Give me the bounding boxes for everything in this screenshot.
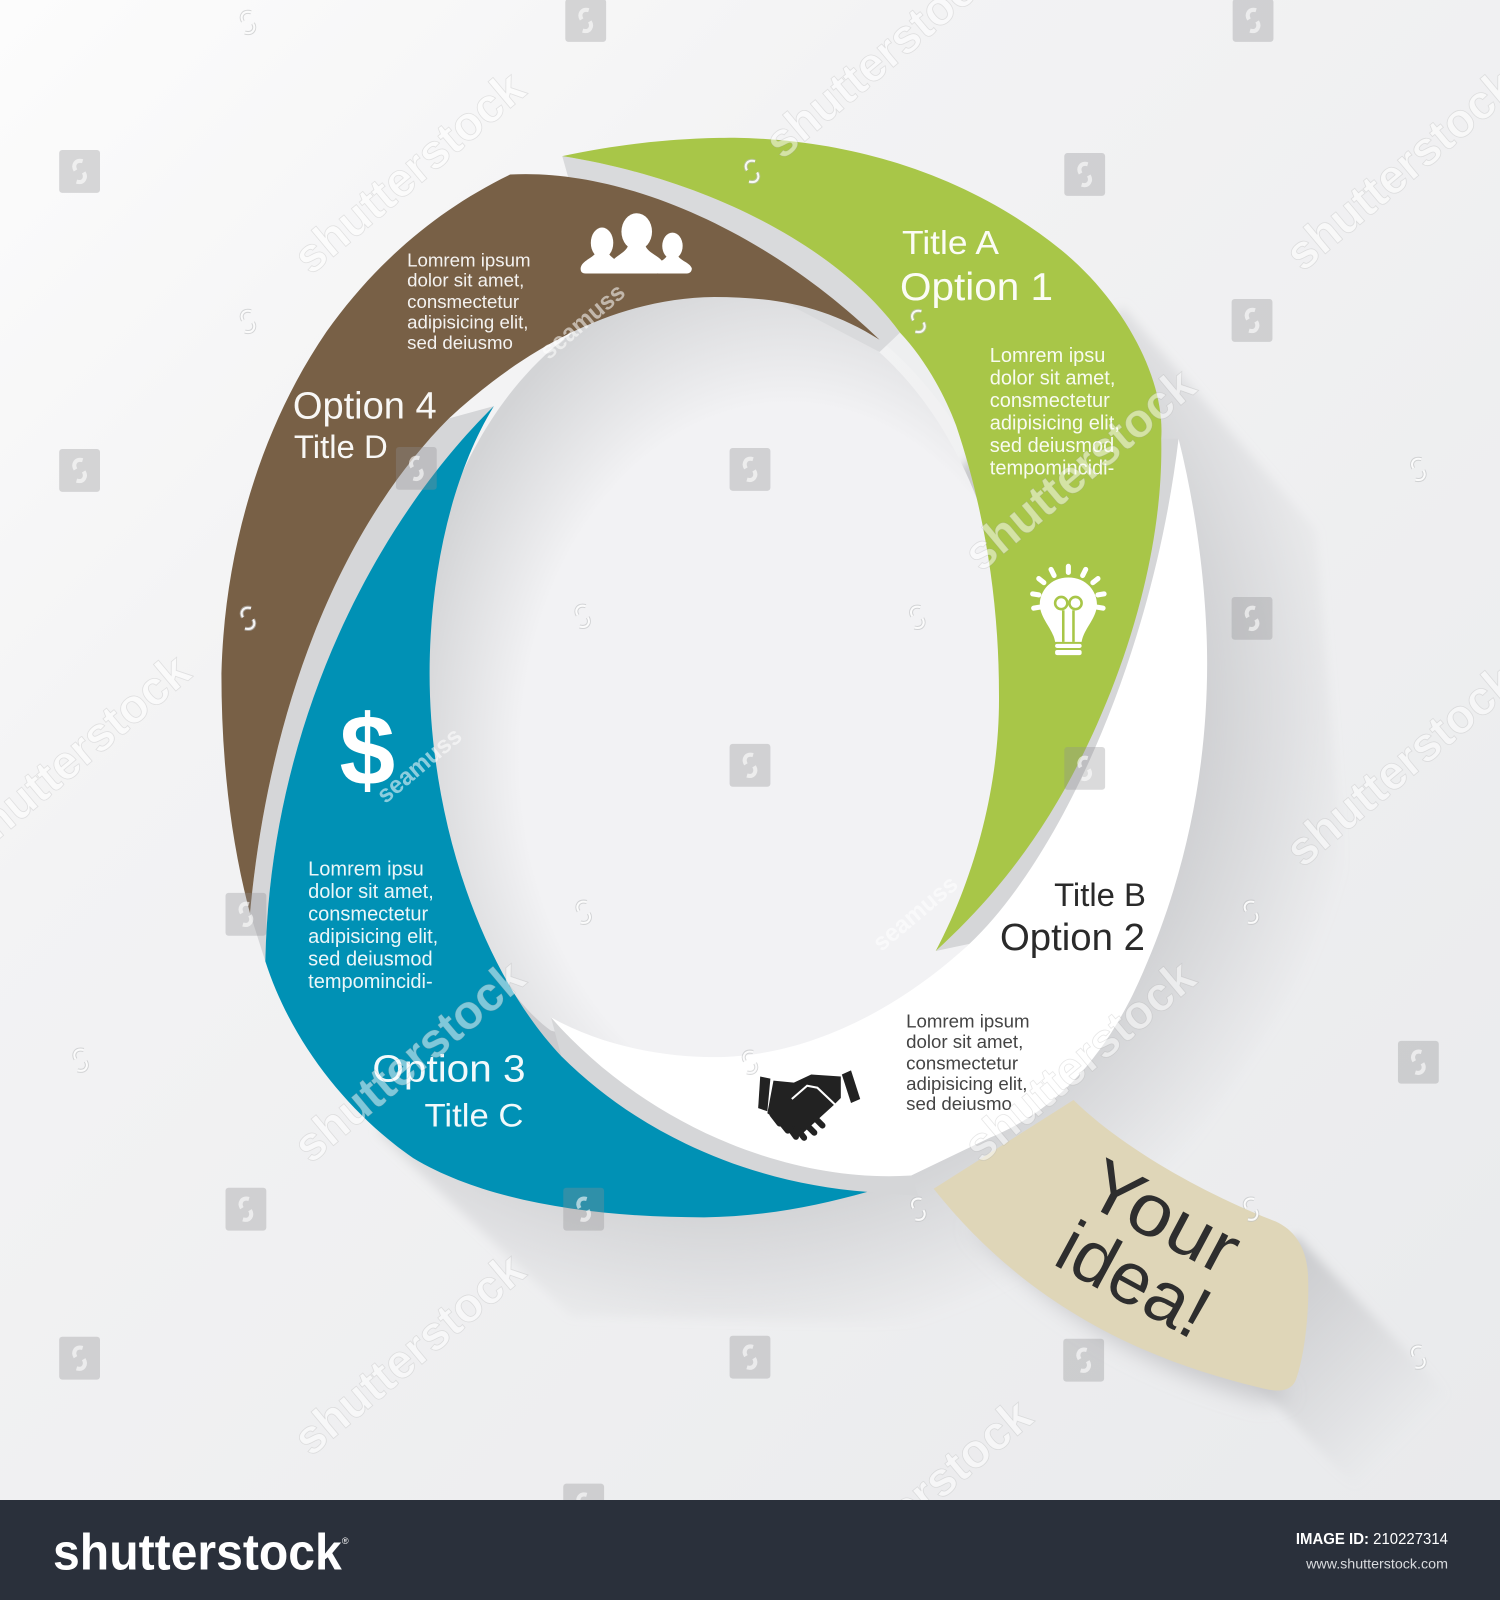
panel: tan tail of the Q [934,1100,1308,1390]
text block A: consmectetur [990,390,1110,412]
text block C: tempomincidi- [308,971,433,993]
heading: Option 2: Option 2 [1000,916,1145,958]
text block C: adipisicing elit, [308,926,438,948]
heading: Title D: Title D [294,428,388,465]
text block B: adipisicing elit, [906,1073,1027,1094]
text block D: consmectetur [407,291,519,312]
website: www.shutterstock.com [1305,1556,1448,1572]
long shadow of the Q ring [378,306,1347,1327]
footer logo: shutterstock [53,1523,342,1580]
text block B: consmectetur [906,1052,1018,1073]
panel: brown segment D [221,174,880,913]
icon: people [581,213,692,273]
watermark overlay: seamuss [868,871,963,957]
text block C: sed deiusmod [308,948,433,970]
text block B: dolor sit amet, [906,1031,1023,1052]
icon: handshake [758,1070,860,1138]
text block A: dolor sit amet, [990,368,1115,390]
callout: Your idea: Your [1073,1142,1254,1291]
heading: Title A: Title A [902,225,1000,262]
watermark overlay: shutterstock [954,950,1206,1173]
watermark overlay: shutterstock [284,1243,535,1466]
panel: blue segment C [265,406,867,1217]
callout: Your idea: idea! [1043,1204,1225,1354]
flap highlight beside green [880,333,956,426]
panel: green segment A [562,138,1161,951]
icon: light bulb [1033,566,1104,655]
text block D: dolor sit amet, [407,270,524,291]
long shadow of the tail [1184,1235,1500,1500]
text block B: Lomrem ipsum [906,1011,1029,1032]
footer logo mark: ® [342,1536,349,1546]
watermark overlay: seamuss [372,723,467,809]
image id: IMAGE ID: 210227314 [1296,1531,1448,1548]
inner hole base [418,286,1015,1071]
icon: dollar: $ [340,695,395,807]
soft shadow under the tail [969,1224,1290,1402]
heading: Option 1: Option 1 [900,266,1053,309]
heading: Option 4: Option 4 [293,384,437,426]
text block D: sed deiusmo [407,332,513,353]
text block C: consmectetur [308,903,429,925]
shadow band: green over white [936,439,1179,951]
inner hole shading [418,286,1015,1071]
watermark overlay: seamuss [535,279,631,365]
heading: Option 3: Option 3 [372,1048,526,1090]
watermark overlay: shutterstock [284,61,535,284]
text block A: Lomrem ipsu [990,345,1105,367]
watermark overlay: shutterstock [284,950,535,1173]
text block B: sed deiusmo [906,1093,1012,1114]
text block D: adipisicing elit, [407,312,528,333]
watermark overlay: shutterstock [954,358,1206,581]
text block A: adipisicing elit, [990,413,1120,435]
heading: Title C: Title C [424,1097,523,1134]
text block A: sed deiusmod [990,435,1114,457]
callout: Your idea [1043,1142,1254,1354]
heading: Title B: Title B [1054,876,1146,913]
text block A: tempomincidi- [990,457,1114,479]
footer bar [0,1500,1500,1600]
shadow band: green over brown [562,156,900,352]
text block D: Lomrem ipsum [407,249,531,270]
text block C: Lomrem ipsu [308,859,424,881]
text block C: dolor sit amet, [308,881,434,903]
shadow band: brown over blue [250,406,494,961]
shadow band: white over blue [551,1017,918,1196]
panel: white segment B [551,439,1207,1176]
